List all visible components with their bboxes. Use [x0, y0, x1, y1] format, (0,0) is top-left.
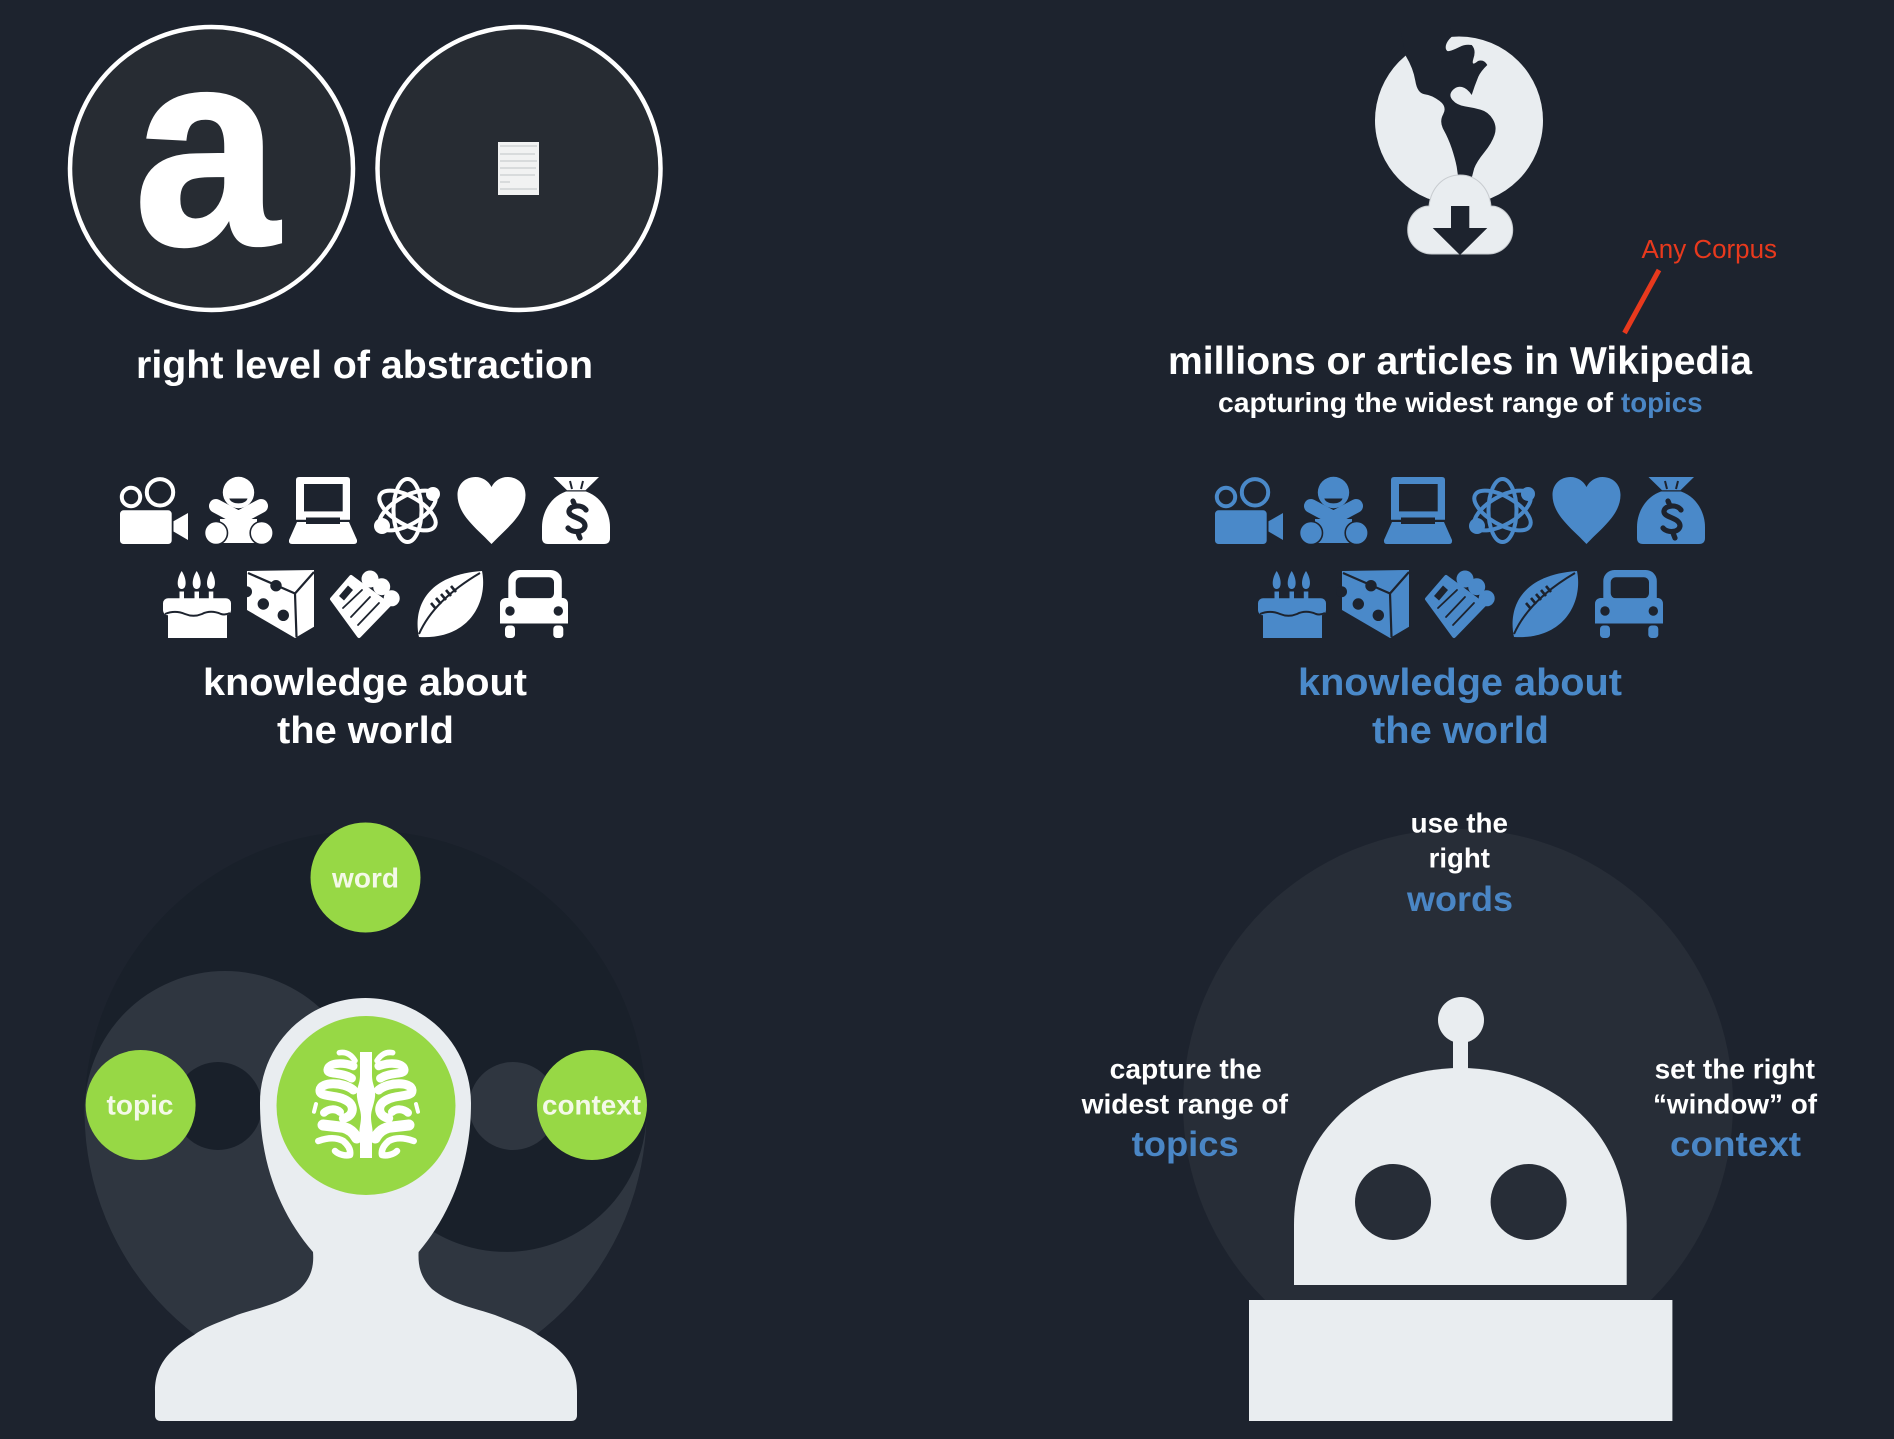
green circle: word: [310, 822, 420, 932]
green circle: topic: topic: [106, 1090, 174, 1120]
label: use the right words: words: [1406, 880, 1513, 919]
icon: birthday cake: [163, 571, 231, 638]
icon: heart: [458, 477, 526, 544]
panel: human word topic context diagram: [84, 822, 647, 1421]
label: use the right words: [1406, 808, 1513, 919]
yin-yang background disc: [84, 830, 646, 1392]
icon: heart: [1552, 477, 1620, 544]
circle with document thumbnail: [378, 27, 660, 310]
circle with letter a: [70, 0, 353, 310]
label: set the right window of context: “window” of: [1653, 1089, 1818, 1120]
person silhouette: [155, 998, 577, 1421]
icon: brain: [314, 1052, 418, 1158]
icon: laptop: [1384, 477, 1452, 544]
robot: [1249, 997, 1672, 1421]
icon: car: [1595, 570, 1663, 638]
robot eyes: [1355, 1164, 1567, 1240]
icon: baby: [204, 477, 273, 544]
antenna: [1438, 997, 1484, 1074]
background disc: [1183, 829, 1733, 1379]
icon: football: [1513, 571, 1578, 637]
icon: movie camera: [120, 479, 188, 544]
icon: baby: [1300, 477, 1368, 544]
robot body: [1249, 1300, 1672, 1421]
caption: knowledge about the world: the world: [1372, 710, 1549, 752]
caption: knowledge about the world: knowledge about: [1298, 662, 1622, 704]
panel: blue knowledge icons: [1215, 477, 1705, 752]
icon: movie camera: [1215, 479, 1283, 544]
icon: birthday cake: [1258, 571, 1326, 638]
panel: Wikipedia corpus: [1168, 28, 1777, 418]
icon: atom: [373, 479, 442, 542]
icon: laptop: [289, 477, 357, 544]
panel: robot words topics context diagram: [1081, 808, 1818, 1421]
caption: knowledge about the world: knowledge about: [203, 662, 527, 704]
heading: millions or articles in Wikipedia: millions or articles in Wikipedia: [1168, 340, 1753, 383]
icon: beer mug: [1427, 570, 1495, 636]
label: capture the widest range of topics: widest range of: [1081, 1089, 1289, 1120]
label: use the right words: use the: [1411, 808, 1508, 838]
label: set the right window of context: [1653, 1054, 1818, 1164]
label: set the right window of context: context: [1670, 1125, 1801, 1164]
green circle: context: [537, 1050, 647, 1160]
green circle: context: context: [542, 1090, 641, 1120]
icon: cheese wedge: [241, 570, 314, 638]
icon: globe with download cloud: [1375, 28, 1543, 255]
green circle: topic: [86, 1050, 196, 1160]
brain circle: [276, 1016, 456, 1195]
icon: cheese wedge: [1336, 570, 1409, 638]
icon: beer mug: [332, 570, 400, 636]
icon: money bag: [1637, 477, 1705, 544]
icon: atom: [1468, 479, 1537, 542]
caption: knowledge about the world: [203, 662, 527, 752]
label: capture the widest range of topics: topics: [1132, 1125, 1239, 1164]
label: set the right window of context: set the right: [1655, 1054, 1815, 1084]
annotation: Any Corpus: Any Corpus: [1642, 236, 1777, 264]
caption: knowledge about the world: [1298, 662, 1622, 752]
subheading: capturing the widest range of topics: capturing the widest range of: [1218, 387, 1614, 418]
subheading: capturing the widest range of topics: topics: [1621, 387, 1702, 418]
robot head: [1294, 1068, 1627, 1285]
annotation: Any Corpus: [1624, 236, 1777, 333]
icon: football: [418, 571, 483, 637]
heading: right level of abstraction: right level of abstraction: [136, 344, 593, 387]
label: use the right words: right: [1429, 842, 1490, 874]
caption: knowledge about the world: the world: [277, 710, 454, 752]
label: capture the widest range of topics: capture the: [1110, 1054, 1262, 1084]
label: capture the widest range of topics: [1081, 1054, 1289, 1164]
icon: money bag: [542, 477, 610, 544]
panel: white knowledge icons: [120, 477, 610, 752]
panel: right level of abstraction: [70, 0, 660, 387]
icon: car: [500, 570, 568, 638]
circle with letter a: a: [134, 0, 281, 304]
green circle: word: word: [331, 862, 399, 894]
